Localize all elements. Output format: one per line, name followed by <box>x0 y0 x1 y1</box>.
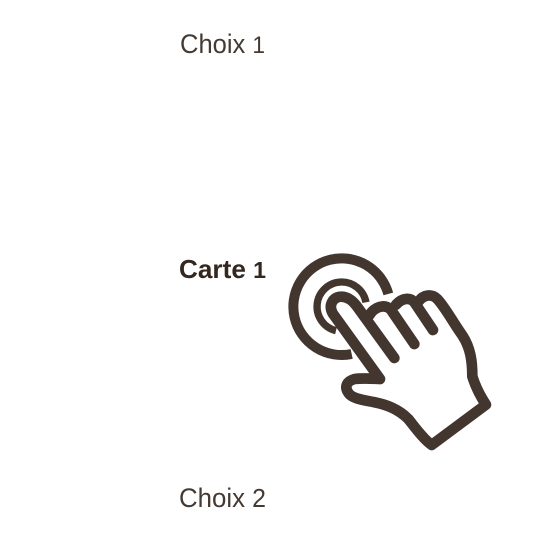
text: Choix 1: Choix 1 <box>180 29 265 59</box>
icon: hand tapping with concentric rings <box>293 258 486 445</box>
icon: hand outline <box>331 295 486 445</box>
icon: inner touch ring <box>317 282 366 331</box>
icon: outer touch ring <box>293 258 388 355</box>
text: Choix 2: Choix 2 <box>179 483 266 513</box>
heading: Carte 1: Carte 1 <box>179 254 266 284</box>
